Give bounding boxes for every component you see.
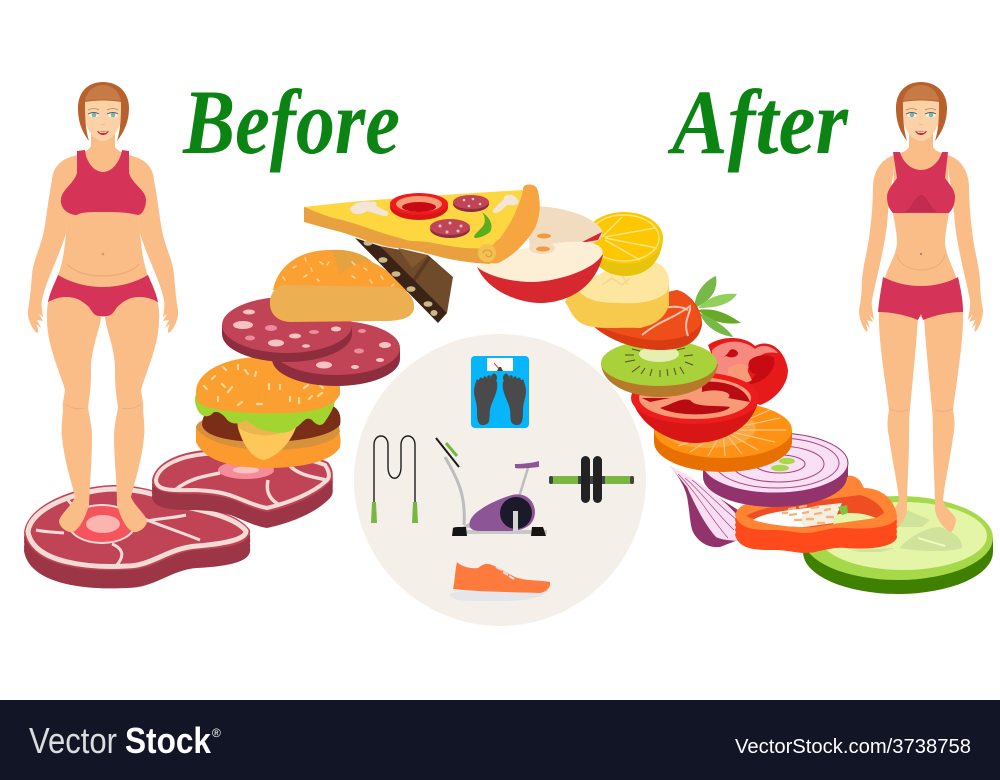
- food: strawberry slice: [590, 290, 702, 350]
- footer logo: VectorStock: Stock: [125, 720, 212, 761]
- footer logo: VectorStock: Vector: [29, 720, 117, 761]
- icon: exercise bike: [436, 438, 547, 536]
- food: kiwi slice: [601, 340, 718, 397]
- food: lettuce leaves: [695, 276, 741, 337]
- footer logo: VectorStock: ®: [212, 726, 221, 740]
- head: woman before: [78, 82, 129, 141]
- food: apple halves: [477, 206, 603, 303]
- pizza toppings: [350, 193, 518, 238]
- apple half front: [477, 231, 603, 303]
- icon: skipping rope: [371, 436, 418, 523]
- figure: woman after: [859, 82, 983, 532]
- food: small steak: [152, 449, 333, 528]
- icon: running shoe: [449, 562, 550, 601]
- food: salami slices: [222, 297, 400, 386]
- footer logo: VectorStock: [29, 720, 221, 761]
- apple half rear: [525, 206, 602, 248]
- food: onion slice: [702, 433, 848, 507]
- food: front tomato slice: [631, 372, 759, 443]
- heading: After: After: [667, 71, 849, 173]
- food: lemon slice: [585, 212, 663, 276]
- salami slice front: [222, 297, 352, 362]
- food: banana slice: [565, 261, 669, 328]
- food: chocolate bar: [355, 238, 453, 323]
- food: large steak: [24, 485, 250, 588]
- icon: bathroom scale: [471, 356, 529, 428]
- food: pizza slice: [304, 184, 540, 264]
- food: bread bun: [270, 250, 414, 322]
- food: cucumber slice: [803, 496, 993, 594]
- footer bar: [0, 700, 1000, 780]
- footer image id: VectorStock.com/3738758: [735, 736, 971, 758]
- head: woman after: [896, 82, 947, 141]
- food: bell pepper ring: [735, 476, 897, 553]
- food: carrot slice: [654, 402, 792, 472]
- figure: woman before: [28, 82, 178, 532]
- panel: fitness equipment circle: [354, 334, 646, 626]
- food: burger: [195, 357, 341, 468]
- heading: Before: Before: [182, 71, 400, 173]
- food: onion wedge: [670, 466, 738, 547]
- salami slice rear: [272, 321, 400, 386]
- food: rear tomato slice: [708, 338, 788, 405]
- icon: ab roller: [549, 456, 634, 503]
